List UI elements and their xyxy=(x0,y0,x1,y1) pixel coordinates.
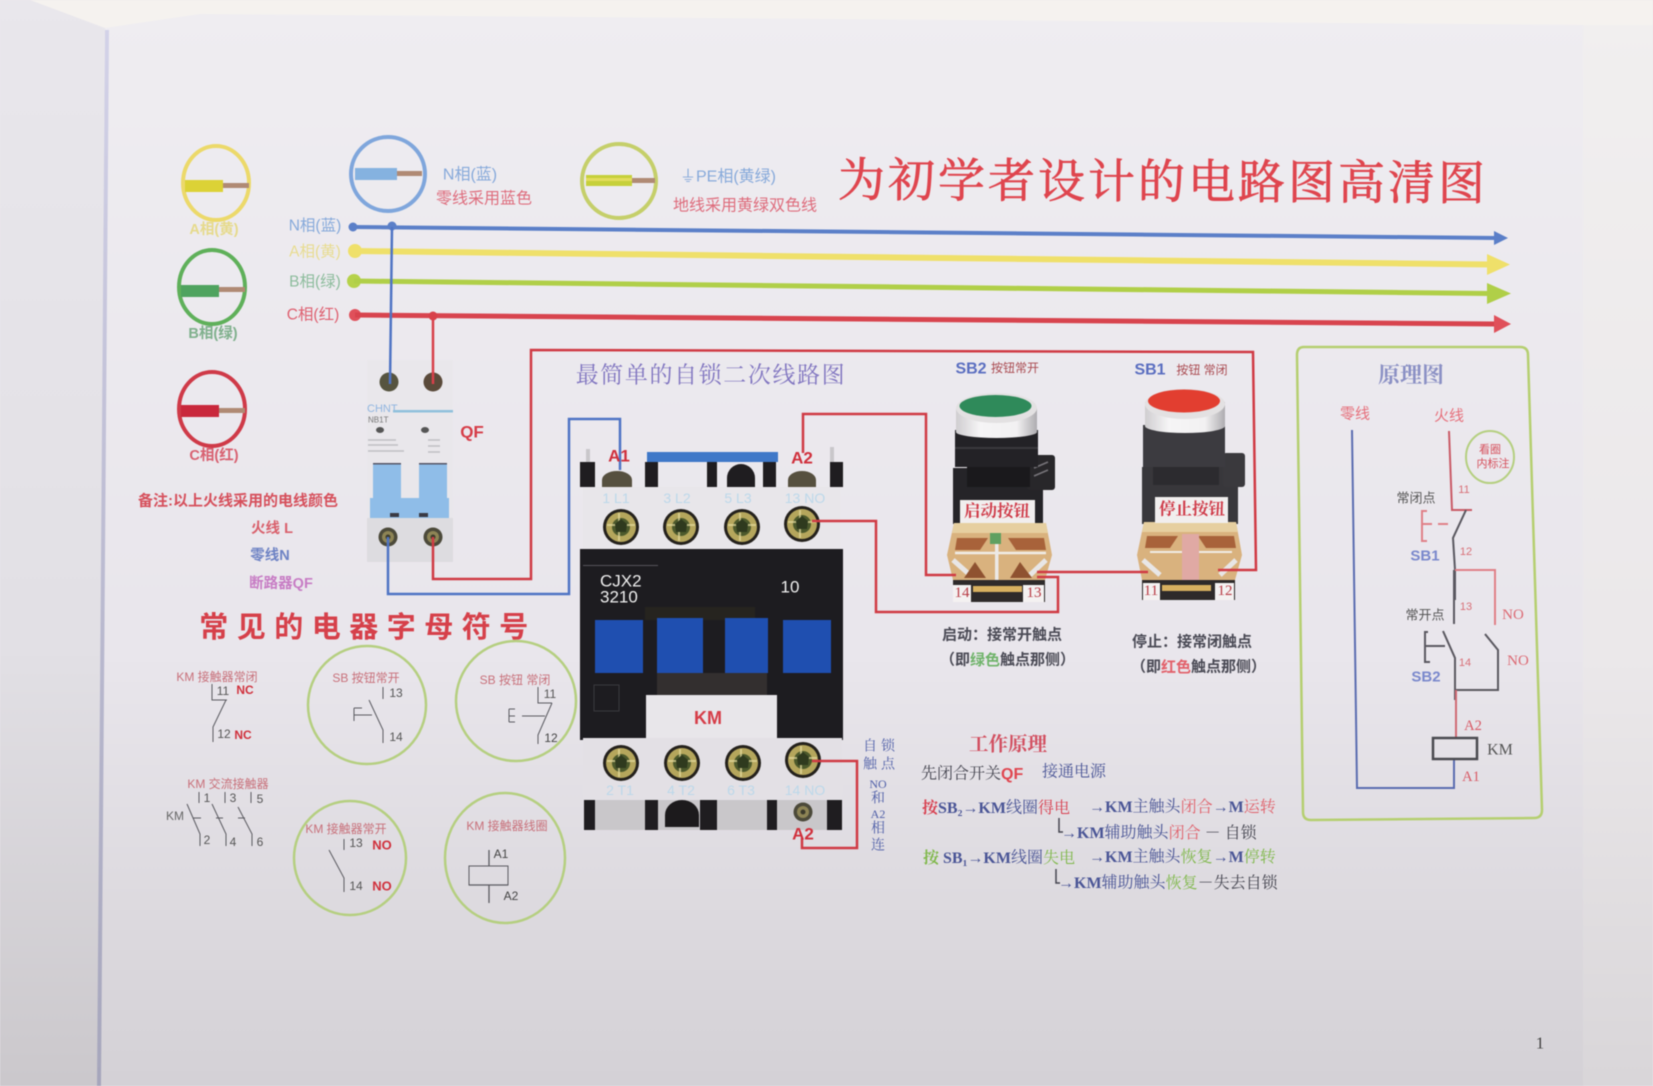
working principle text: 先闭合开关QF xyxy=(921,764,1023,782)
live wire feed to breaker xyxy=(428,312,438,384)
working principle text: 按 SB₁→KM线圈失电 xyxy=(923,848,1075,866)
symbol circle: KM normally open: NO xyxy=(372,878,392,894)
symbol: KM main contacts: 5 xyxy=(257,792,264,806)
SB2 normally open branch: NO xyxy=(1502,607,1524,623)
symbol: KM NC contact: NC xyxy=(236,683,254,697)
symbol: KM main contacts xyxy=(166,776,269,849)
symbol circle: KM normally open: NO xyxy=(372,838,392,852)
SB2 label: 按钮常开 xyxy=(991,360,1039,375)
self-lock contact note: 自 xyxy=(863,738,877,754)
self-lock contact note: NO xyxy=(869,777,887,791)
contactor KM: KM xyxy=(694,708,722,728)
neutral and live labels xyxy=(1340,406,1464,424)
contactor KM: CJX2 xyxy=(600,572,642,590)
wire sample C phase red: C相(红) xyxy=(189,446,239,464)
neutral wire feed to breaker xyxy=(388,222,396,384)
phase line A with arrow: A相(黄) xyxy=(289,242,341,260)
contactor KM: 1 L1 xyxy=(602,490,630,506)
phase line N with arrow xyxy=(289,216,1508,245)
wire sample N blue xyxy=(351,137,532,211)
push button SB1 red: 停止按钮 xyxy=(1159,498,1226,518)
symbol: KM NC contact: 11 xyxy=(217,684,230,698)
symbol: KM main contacts: 4 xyxy=(230,835,237,849)
working principle text: →KM辅助触头恢复－失去自锁 xyxy=(1058,872,1279,892)
SB2 normally open branch: 常开点 xyxy=(1405,608,1445,622)
symbol: KM main contacts: 2 xyxy=(204,833,211,847)
symbol circle: KM coil: A1 xyxy=(494,847,509,861)
title: 为初学者设计的电路图高清图 xyxy=(838,155,1488,211)
QF label: QF xyxy=(460,422,484,442)
phase line C with arrow: C相(红) xyxy=(287,306,339,324)
red wire A2 to SB2 14 xyxy=(803,414,956,575)
push button SB2 green: 启动按钮 xyxy=(964,500,1030,520)
coil KM xyxy=(1433,718,1513,785)
circled note: 内标注 xyxy=(1476,456,1510,470)
symbol circle: KM normally open xyxy=(294,801,406,915)
push button SB1 red: 11 xyxy=(1144,583,1158,599)
symbol: KM main contacts: 3 xyxy=(230,791,237,805)
symbol circle: SB normally open: SB 按钮常开 xyxy=(332,670,400,685)
button captions: 停止：接常闭触点 xyxy=(1132,632,1252,650)
note: wire colours xyxy=(138,492,338,592)
red wire contactor 14 to coil A2 xyxy=(802,761,857,848)
note: wire colours: 零线N xyxy=(250,546,290,564)
button captions xyxy=(940,626,1266,676)
push button SB2 green: 13 xyxy=(1026,585,1042,601)
SB1 normally closed branch xyxy=(1396,431,1495,625)
symbol: KM main contacts: KM xyxy=(166,809,184,823)
terminal label A1: A1 xyxy=(608,446,630,466)
contactor KM xyxy=(580,447,843,830)
schematic panel xyxy=(1297,347,1542,820)
symbol circle: SB normally closed: SB 按钮 常闭 xyxy=(480,672,550,687)
self-lock contact note xyxy=(863,738,896,854)
contactor KM: 5 L3 xyxy=(724,490,752,506)
secondary circuit heading: 最简单的自锁二次线路图 xyxy=(576,362,846,388)
note: wire colours: 备注:以上火线采用的电线颜色 xyxy=(138,492,338,510)
wire sample PE yellow-green: ⏚PE相(黄绿) xyxy=(680,168,776,186)
SB2 normally open branch: 14 xyxy=(1459,657,1471,669)
SB1 normally closed branch: 常闭点 xyxy=(1396,490,1436,506)
SB1 label: 按钮 常闭 xyxy=(1176,362,1228,377)
self-lock contact note: A2 xyxy=(871,807,885,821)
note: wire colours: 断路器QF xyxy=(249,574,313,592)
symbol circle: KM normally open: 14 xyxy=(349,879,363,893)
wire sample N blue: N相(蓝) xyxy=(443,166,497,184)
symbol circle: SB normally closed: 11 xyxy=(544,687,557,701)
symbol: KM NC contact: KM 接触器常闭 xyxy=(176,669,258,684)
blue control wire to A1 xyxy=(388,419,620,594)
working principle text xyxy=(921,762,1279,892)
wire sample N blue: 零线采用蓝色 xyxy=(436,190,532,208)
circled note: 看圈 xyxy=(1479,442,1501,456)
SB2 normally open branch: NO xyxy=(1507,653,1529,669)
SB1 label xyxy=(1134,362,1228,378)
working principle text: 接通电源 xyxy=(1042,762,1107,780)
self-lock contact note: 触 xyxy=(863,756,878,772)
symbol circle: KM normally open: KM 接触器常开 xyxy=(305,821,387,836)
SB1 normally closed branch: 12 xyxy=(1460,546,1472,558)
button captions: （即红色触点那侧） xyxy=(1131,658,1266,676)
working principle text: →KM主触头恢复→M停转 xyxy=(1089,848,1276,866)
symbol circle: SB normally open xyxy=(308,646,426,764)
self-lock contact note: 点 xyxy=(881,756,896,772)
neutral line xyxy=(1352,430,1454,788)
self-lock contact note: 连 xyxy=(871,838,885,854)
button captions: 启动：接常开触点 xyxy=(942,626,1062,644)
symbol circle: KM coil xyxy=(445,793,565,923)
symbol: KM main contacts: KM 交流接触器 xyxy=(187,776,269,791)
coil KM: A1 xyxy=(1462,769,1480,785)
self-lock contact note: 锁 xyxy=(881,738,896,754)
note: wire colours: 火线 L xyxy=(251,519,293,537)
SB2 normally open branch: SB2 xyxy=(1411,668,1441,686)
symbol circle: SB normally open: 14 xyxy=(389,730,403,744)
self-lock contact note: 和 xyxy=(871,790,885,806)
symbol circle: SB normally closed: 12 xyxy=(544,731,558,745)
button captions: （即绿色触点那侧） xyxy=(940,650,1075,668)
SB1 normally closed branch: 11 xyxy=(1458,484,1470,496)
symbol circle: KM coil: KM 接触器线圈 xyxy=(466,818,548,833)
SB1 normally closed branch: SB1 xyxy=(1410,548,1440,564)
phase line B with arrow xyxy=(289,272,1511,304)
push button SB2 green: 14 xyxy=(954,585,970,601)
terminal label A2 top: A2 xyxy=(791,448,813,468)
working principle heading: 工作原理 xyxy=(969,734,1047,756)
phase line N with arrow: N相(蓝) xyxy=(289,216,341,234)
circuit breaker QF: NB1T xyxy=(368,416,389,424)
working principle text: 按SB₂→KM线圈得电 xyxy=(922,798,1070,816)
terminal label A2 bottom: A2 xyxy=(792,824,814,844)
symbol: KM NC contact xyxy=(176,669,258,742)
push button SB1 red: 12 xyxy=(1218,583,1232,599)
wire sample C phase red xyxy=(179,372,245,464)
red wire SB2 13 to contactor 13 xyxy=(812,521,1058,612)
symbol: KM NC contact: NC xyxy=(234,728,252,742)
working principle text: →KM主触头闭合→M运转 xyxy=(1089,798,1276,816)
circuit breaker QF: CHNT xyxy=(367,403,398,415)
contactor KM: 14 NO xyxy=(785,782,825,798)
symbol circle: KM normally open: 13 xyxy=(349,836,363,850)
contactor KM: 3 L2 xyxy=(663,490,691,506)
symbol: KM main contacts: 1 xyxy=(204,791,211,805)
push button SB2 green xyxy=(947,393,1055,602)
wire sample PE yellow-green: 地线采用黄绿双色线 xyxy=(673,196,817,214)
circled note xyxy=(1466,431,1514,483)
SB2 label: SB2 xyxy=(955,360,987,378)
circuit breaker QF xyxy=(367,360,453,562)
SB2 label xyxy=(955,360,1039,378)
schematic heading: 原理图 xyxy=(1378,362,1444,388)
symbol circle: SB normally open: 13 xyxy=(389,686,403,700)
symbols heading: 常见的电器字母符号 xyxy=(199,611,537,644)
wire sample B phase green xyxy=(179,250,245,342)
contactor KM: 2 T1 xyxy=(606,782,634,798)
phase line A with arrow xyxy=(289,242,1510,275)
working principle text: →KM辅助触头闭合 － 自锁 xyxy=(1061,822,1258,842)
phase line C with arrow xyxy=(287,306,1511,333)
symbol: KM NC contact: 12 xyxy=(217,727,231,741)
wire sample A phase yellow: A相(黄) xyxy=(189,220,239,238)
contactor KM: 13 NO xyxy=(785,490,825,506)
wire sample A phase yellow xyxy=(183,146,249,238)
phase line B with arrow: B相(绿) xyxy=(289,272,341,290)
symbol circle: SB normally closed xyxy=(456,641,576,761)
SB2 normally open branch xyxy=(1405,570,1529,738)
coil KM: A2 xyxy=(1464,718,1482,734)
symbol: KM main contacts: 6 xyxy=(257,835,264,849)
SB2 normally open branch: 13 xyxy=(1460,601,1472,613)
neutral and live labels: 零线 xyxy=(1340,406,1370,422)
contactor KM: 6 T3 xyxy=(727,782,755,798)
contactor KM: 10 xyxy=(781,578,799,596)
symbol circle: KM coil: A2 xyxy=(504,889,519,903)
push button SB1 red xyxy=(1137,389,1245,600)
SB1 label: SB1 xyxy=(1134,362,1166,378)
red wire SB2 13 to SB1 11 xyxy=(1037,571,1148,573)
wire sample B phase green: B相(绿) xyxy=(188,325,238,342)
wire sample PE yellow-green xyxy=(582,144,817,218)
self-lock contact note: 相 xyxy=(871,820,885,836)
contactor KM: 4 T2 xyxy=(667,782,695,798)
page number: 1 xyxy=(1536,1034,1544,1052)
coil KM: KM xyxy=(1487,742,1513,758)
contactor KM: 3210 xyxy=(600,588,638,606)
red control wire from breaker through SB1 xyxy=(433,350,1256,579)
neutral and live labels: 火线 xyxy=(1434,408,1464,424)
